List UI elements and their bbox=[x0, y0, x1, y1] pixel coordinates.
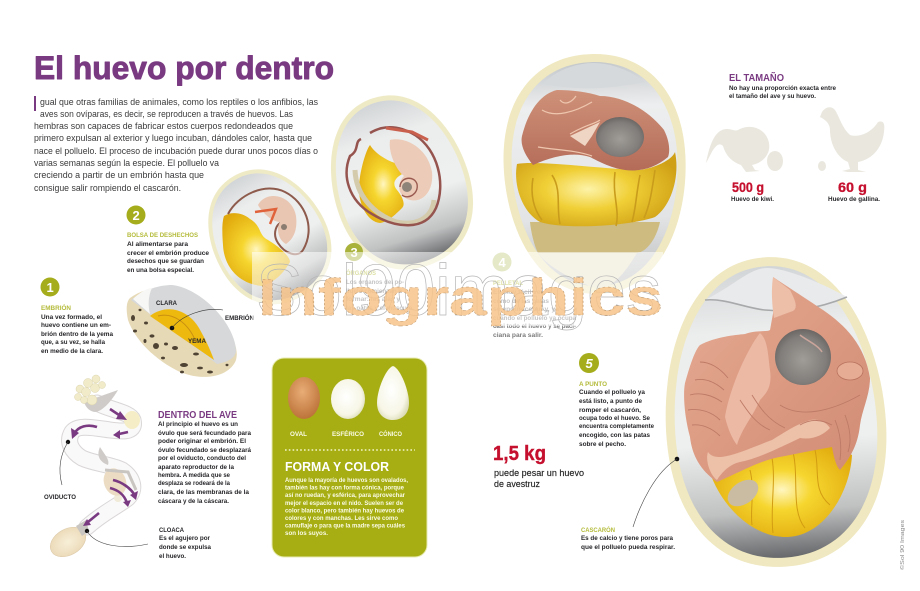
egg stage 2 bbox=[184, 148, 352, 324]
step 5: a punto: A PUNTO bbox=[579, 381, 607, 388]
step 1: embrión: brión dentro de la yema bbox=[41, 331, 113, 338]
intro paragraph: aves son ovíparas, es decir, se reproducen a través de huevos. Las bbox=[40, 109, 293, 120]
eggs in transit bbox=[124, 411, 140, 429]
panel body text: así no ruedan, y esférica, para aprovechar bbox=[285, 492, 405, 499]
egg shape labels: OVAL bbox=[290, 431, 307, 438]
step 2: bolsa de deshechos: en una bolsa especial. bbox=[127, 267, 194, 274]
panel body text: camuflaje o para que la madre sepa cuáles bbox=[285, 523, 405, 530]
text: dentro del ave: óvulo que será fecundado para bbox=[158, 430, 251, 437]
stat: hen egg bbox=[828, 179, 880, 203]
diagram: oviduct bbox=[44, 375, 148, 563]
panel body text: Aunque la mayoría de huevos son ovalados, bbox=[285, 477, 408, 484]
egg stage 4 bbox=[500, 51, 690, 297]
panel: forma y color bbox=[272, 358, 427, 557]
yolk sac patch bbox=[723, 474, 763, 512]
step 4: ciana para salir. bbox=[493, 332, 543, 339]
panel body text: son los suyos. bbox=[285, 530, 328, 537]
stat: kiwi egg: 500 g bbox=[732, 179, 764, 195]
step 4: casi todo el huevo y se pací- bbox=[493, 323, 576, 330]
icon: spherical egg bbox=[331, 379, 365, 419]
chick eye bbox=[775, 329, 831, 385]
intro paragraph bbox=[34, 96, 318, 194]
step 4: se endurecerán y, ya bbox=[493, 306, 559, 313]
step 3: órganos: lluelo comienzan a bbox=[346, 288, 402, 295]
step 2: bolsa de deshechos: 2 bbox=[132, 208, 140, 223]
step 4 bbox=[492, 252, 576, 339]
icon: hen silhouette bbox=[818, 107, 884, 172]
intro paragraph: gual que otras familias de animales, como los reptiles o los anfibios, las bbox=[40, 97, 318, 108]
text: cloaca bbox=[159, 527, 211, 560]
arrows bbox=[74, 409, 134, 522]
step 4: Es muy fácil ver bbox=[493, 289, 543, 296]
text: dentro del ave: poder originar el embrión. El bbox=[158, 438, 246, 445]
egg shape labels: ESFÉRICO bbox=[332, 429, 364, 438]
text: cloaca: Es el agujero por bbox=[159, 535, 210, 542]
stat: ostrich egg: 1,5 kg bbox=[493, 442, 546, 465]
text: cloaca: donde se expulsa bbox=[159, 544, 211, 551]
text: dentro del ave: DENTRO DEL AVE bbox=[158, 409, 237, 421]
text: cloaca: CLOACA bbox=[159, 527, 184, 534]
step 5: a punto: Cuando el polluelo ya bbox=[579, 389, 645, 396]
stat: kiwi egg bbox=[731, 179, 774, 203]
text: dentro del ave bbox=[158, 409, 251, 505]
step 4: cuando el polluelo ya ocupa bbox=[493, 315, 576, 322]
step 1: embrión bbox=[40, 278, 113, 355]
panel: el tamaño: No hay una proporción exacta entre bbox=[729, 85, 836, 92]
icon: conical egg bbox=[377, 366, 409, 420]
step 2: bolsa de deshechos: Al alimentarse para bbox=[127, 241, 188, 248]
quail egg cutaway bbox=[127, 285, 254, 377]
step 5: a punto: encuentra completamente bbox=[579, 423, 654, 430]
step 5: a punto: romper el cascarón, bbox=[579, 407, 641, 414]
step 2: bolsa de deshechos: crecer el embrión produce bbox=[127, 250, 209, 257]
panel body text: también las hay con forma cónica, porque bbox=[285, 485, 404, 492]
panel: el tamaño: EL TAMAÑO bbox=[729, 71, 784, 84]
step 1: embrión: Una vez formado, el bbox=[41, 314, 102, 321]
ovary bbox=[74, 375, 106, 405]
step 5: a punto: ocupa todo el huevo. Se bbox=[579, 415, 650, 422]
step 1: embrión: que, a su vez, se halla bbox=[41, 339, 105, 346]
step 2: bolsa de deshechos bbox=[126, 206, 209, 274]
stat: ostrich egg: de avestruz bbox=[494, 479, 540, 490]
step 3: órganos: 3 bbox=[350, 245, 358, 260]
step 5: a punto: sobre el pecho. bbox=[579, 441, 626, 448]
step 1: embrión: 1 bbox=[46, 280, 54, 295]
text: dentro del ave: cáscara y de la cáscara. bbox=[158, 498, 229, 505]
step 4: cómo de las patas bbox=[493, 298, 549, 305]
text: cloaca: el huevo. bbox=[159, 553, 186, 560]
panel body text bbox=[285, 477, 408, 537]
panel body text: color blanco, pero también hay huevos de bbox=[285, 507, 404, 514]
stat: ostrich egg bbox=[493, 442, 584, 490]
intro paragraph: creciendo a partir de un embrión hasta que bbox=[34, 170, 204, 181]
chick wing bbox=[725, 333, 771, 445]
text: dentro del ave: por el oviducto, conducto del bbox=[158, 455, 246, 462]
stat: hen egg: 60 g bbox=[838, 179, 867, 195]
panel body text: mejor el espacio en el nido. Suelen ser de bbox=[285, 500, 403, 507]
step 1: embrión: EMBRIÓN bbox=[41, 303, 71, 312]
intro paragraph: nace el polluelo. El proceso de incubación puede durar unos pocos días o bbox=[34, 146, 318, 157]
label: clara: CLARA bbox=[156, 300, 177, 307]
step 4: PELLETAL bbox=[493, 280, 523, 287]
funnel bbox=[84, 390, 118, 412]
step 3: órganos: las patas y el músculo. bbox=[346, 305, 414, 312]
chick arm bbox=[707, 420, 830, 480]
label: embrión: EMBRIÓN bbox=[225, 313, 254, 322]
egg stage 3 bbox=[308, 77, 492, 287]
text: dentro del ave: Al principio el huevo es un bbox=[158, 421, 238, 428]
egg shape labels bbox=[290, 429, 402, 438]
intro paragraph: varias semanas según la especie. El polluelo va bbox=[34, 158, 220, 169]
yolk bbox=[712, 443, 852, 537]
label: yema: YEMA bbox=[188, 338, 206, 345]
step 4: 4 bbox=[498, 255, 506, 270]
step 1: embrión: en medio de la clara. bbox=[41, 348, 103, 355]
egg stage 5 bbox=[654, 250, 896, 574]
panel body text: colores y con manchas. Les sirve como bbox=[285, 515, 398, 522]
stat: kiwi egg: Huevo de kiwi. bbox=[731, 196, 774, 203]
icon: oval egg bbox=[288, 377, 320, 419]
step 5: a punto: está listo, a punto de bbox=[579, 398, 642, 405]
chick head highlight bbox=[772, 277, 796, 318]
step 1: embrión: huevo contiene un em- bbox=[41, 322, 111, 329]
step 2: bolsa de deshechos: BOLSA DE DESHECHOS bbox=[127, 232, 198, 239]
credit: ©Sol 90 Images bbox=[899, 519, 906, 570]
panel: el tamaño: el tamaño del ave y su huevo. bbox=[729, 93, 816, 100]
step 2: bolsa de deshechos: desechos que se guardan bbox=[127, 258, 204, 265]
text: dentro del ave: desplaza se rodeará de la bbox=[158, 480, 230, 487]
step 5: a punto bbox=[579, 353, 654, 448]
text: dentro del ave: clara, de las membranas de la bbox=[158, 489, 249, 496]
panel heading: FORMA Y COLOR bbox=[285, 459, 390, 474]
intro paragraph: hembras son capaces de fabricar estos cuerpos redondeados que bbox=[34, 121, 293, 132]
watermark: Infographics bbox=[258, 269, 663, 327]
panel: el tamaño bbox=[706, 71, 884, 203]
watermark: Sol90images bbox=[256, 251, 661, 331]
callout: cascarón bbox=[581, 457, 679, 551]
icon: kiwi silhouette bbox=[706, 127, 783, 172]
step 3: órganos: ÓRGANOS bbox=[346, 268, 376, 277]
callout: cascarón: Es de calcio y tiene poros para bbox=[581, 535, 673, 542]
step 5: a punto: encogido, con las patas bbox=[579, 432, 650, 439]
step 3: órganos: Los órganos del po- bbox=[346, 279, 404, 286]
stat: hen egg: Huevo de gallina. bbox=[828, 196, 880, 203]
step 3: órganos: formar: las alas y bbox=[346, 296, 400, 303]
intro paragraph: consigue salir rompiendo el cascarón. bbox=[34, 183, 181, 194]
callout: cascarón: CASCARÓN bbox=[581, 525, 615, 534]
text: dentro del ave: aparato reproductor de la bbox=[158, 464, 234, 471]
egg shape labels: CÓNICO bbox=[379, 429, 402, 438]
final egg bbox=[45, 521, 91, 563]
callout: cascarón: que el polluelo pueda respirar. bbox=[581, 544, 675, 551]
text: dentro del ave: hembra. A medida que se bbox=[158, 472, 230, 479]
label: oviducto: OVIDUCTO bbox=[44, 494, 76, 501]
text: dentro del ave: óvulo fecundado se desplazará bbox=[158, 447, 251, 454]
stat: ostrich egg: puede pesar un huevo bbox=[494, 468, 584, 479]
step 3: órganos bbox=[345, 243, 414, 312]
intro paragraph: primero expulsan al exterior y luego incuban, dándoles calor, hasta que bbox=[34, 133, 312, 144]
chick body bbox=[684, 277, 870, 482]
step 5: a punto: 5 bbox=[586, 356, 594, 371]
title: El huevo por dentro bbox=[34, 50, 334, 86]
